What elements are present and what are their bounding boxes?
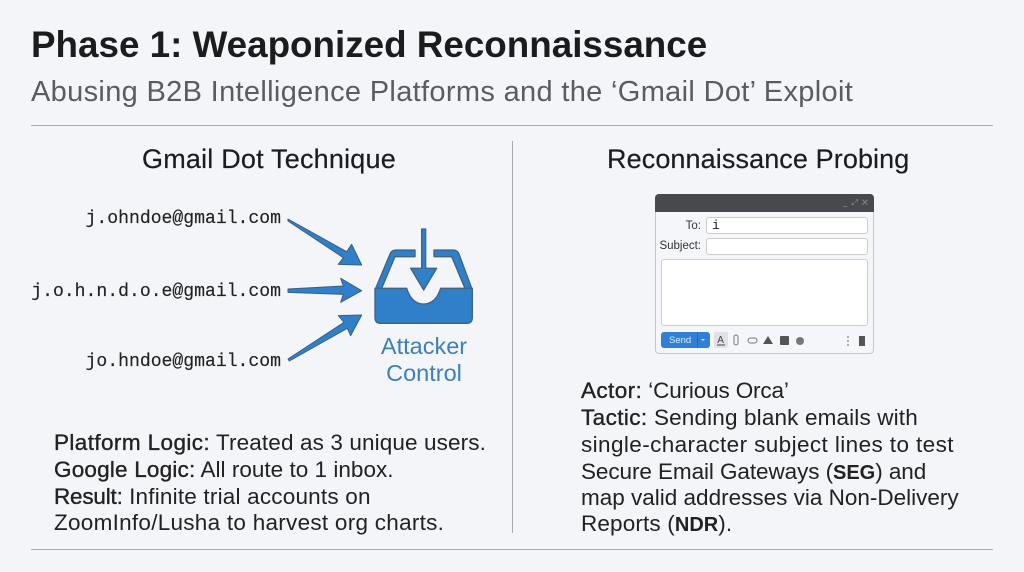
toolbar icons: A	[717, 335, 724, 346]
platform logic text: Google Logic: All route to 1 inbox.	[54, 457, 394, 482]
label: Attacker Control: Control	[386, 360, 462, 386]
To field	[706, 217, 868, 234]
actor and tactic text: Reports (NDR).	[581, 511, 732, 536]
diagram: arrows and inbox icon	[288, 218, 473, 362]
Subject label: Subject:	[659, 240, 701, 252]
To field: i	[712, 218, 720, 233]
email address 1: j.ohndoe@gmail.com	[86, 209, 281, 229]
actor and tactic text: Secure Email Gateways (SEG) and	[581, 459, 926, 484]
platform logic text: Result: Infinite trial accounts on	[54, 484, 371, 509]
send button	[661, 332, 710, 348]
arrow 3	[288, 315, 362, 361]
arrow 2	[288, 278, 362, 302]
actor and tactic text: map valid addresses via Non-Delivery	[581, 485, 959, 510]
icon: inbox tray	[375, 229, 472, 323]
Subject field	[706, 238, 868, 255]
title bar	[655, 194, 874, 212]
To label: To:	[686, 220, 701, 232]
actor and tactic text	[580, 378, 959, 536]
panel: Gmail Dot Technique	[31, 144, 486, 535]
platform logic text	[54, 430, 486, 535]
toolbar icons	[714, 332, 865, 348]
send button: Send	[669, 335, 691, 346]
actor and tactic text: Tactic: Sending blank emails with	[581, 405, 918, 430]
heading: Reconnaissance Probing: Reconnaissance Probing	[607, 144, 909, 174]
actor and tactic text: single-character subject lines to test	[581, 432, 954, 457]
label: Attacker Control	[381, 333, 467, 386]
message body	[661, 259, 868, 326]
actor and tactic text: Actor: ‘Curious Orca’	[581, 378, 789, 403]
platform logic text: ZoomInfo/Lusha to harvest org charts.	[54, 510, 444, 535]
panel: Reconnaissance Probing	[580, 144, 959, 536]
heading: Gmail Dot Technique: Gmail Dot Technique	[142, 144, 396, 174]
email address 2: j.o.h.n.d.o.e@gmail.com	[31, 282, 281, 302]
platform logic text: Platform Logic: Treated as 3 unique users.	[54, 430, 486, 455]
label: Attacker Control: Attacker	[381, 333, 467, 359]
arrow 1	[288, 219, 362, 265]
title bar: _⤢✕	[843, 198, 872, 207]
subtitle: Abusing B2B Intelligence Platforms and the ‘Gmail Dot’ Exploit	[31, 76, 853, 108]
compose window mockup	[655, 194, 874, 354]
email address 3: jo.hndoe@gmail.com	[86, 352, 281, 372]
title: Phase 1: Weaponized Reconnaissance	[31, 24, 707, 65]
